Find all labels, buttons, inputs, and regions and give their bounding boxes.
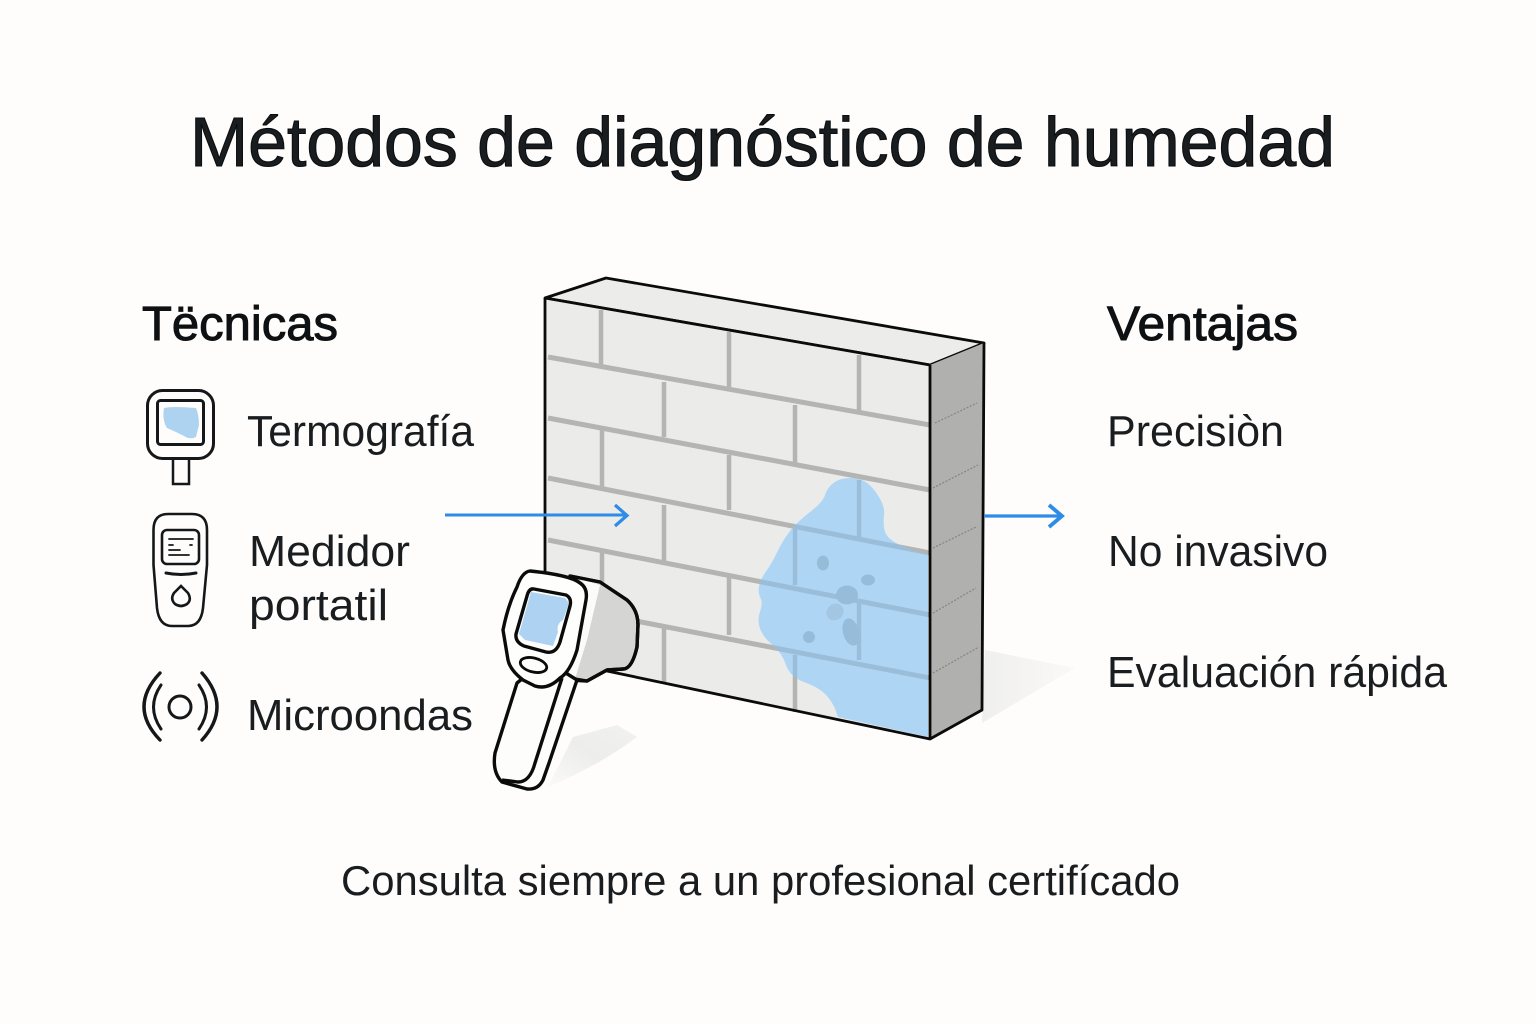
heading: técnicas: Tëcnicas (142, 298, 338, 351)
panel: técnicas (142, 298, 475, 740)
wall side face (930, 343, 984, 739)
meter handle (494, 660, 577, 789)
label: precisión: Precisiòn (1107, 407, 1284, 456)
meter nozzle (570, 576, 638, 681)
arrow: input (445, 505, 627, 526)
meter screen (516, 589, 570, 652)
icon: thermography device (148, 390, 214, 484)
footer note: Consulta siempre a un profesional certifícado (341, 857, 1180, 904)
label: medidor portatil (249, 527, 410, 630)
meter shadow (548, 725, 637, 787)
icon: microwave waves (144, 673, 217, 740)
panel: ventajas (1107, 298, 1448, 697)
meter head (503, 571, 586, 687)
label: evaluación rápida: Evaluación rápida (1107, 648, 1448, 697)
label: microondas: Microondas (247, 691, 473, 740)
meter button (519, 655, 548, 675)
damp stain (758, 478, 928, 737)
wall front face with bricks (545, 298, 930, 739)
wall top face (545, 278, 984, 365)
title: Métodos de diagnóstico de humedad (190, 103, 1335, 181)
illustration: brick wall (545, 278, 984, 739)
label: termografía: Termografía (247, 407, 475, 456)
heading: ventajas: Ventajas (1107, 298, 1298, 351)
wall outlines (545, 298, 984, 739)
label: medidor portatil: Medidor (249, 527, 410, 576)
icon: handheld meter (154, 514, 207, 626)
wall shadow (982, 650, 1075, 723)
label: no invasivo: No invasivo (1108, 527, 1328, 576)
label: medidor portatil: portatil (249, 581, 388, 630)
illustration: infrared meter (494, 571, 638, 789)
arrow: output (984, 505, 1062, 527)
